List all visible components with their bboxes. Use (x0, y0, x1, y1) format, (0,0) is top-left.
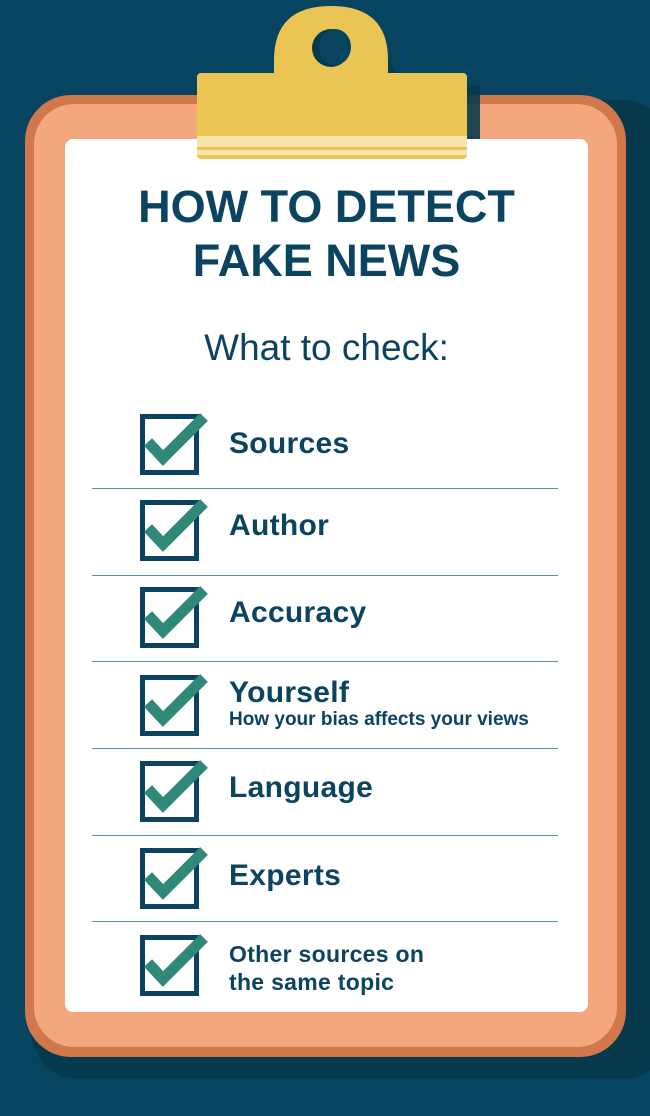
clip shadow (388, 58, 480, 139)
item: yourself: How your bias affects your views (229, 709, 529, 730)
board face (34, 104, 617, 1047)
title: HOW TO DETECT (138, 181, 515, 232)
clipboard board (25, 95, 626, 1057)
subtitle: What to check: (204, 327, 449, 368)
item: author: Author (229, 509, 329, 542)
item: yourself (229, 676, 529, 730)
item: yourself: Yourself (229, 676, 349, 709)
item: language: Language (229, 771, 373, 804)
item: accuracy: Accuracy (229, 596, 366, 629)
item: other sources (229, 941, 424, 995)
paper (65, 139, 588, 1012)
title: FAKE NEWS (193, 235, 460, 286)
title (138, 181, 515, 286)
item: other sources: Other sources on (229, 941, 424, 967)
item: other sources: the same topic (229, 969, 394, 995)
item: experts: Experts (229, 859, 341, 892)
clip (197, 6, 467, 159)
item: sources: Sources (229, 427, 350, 460)
